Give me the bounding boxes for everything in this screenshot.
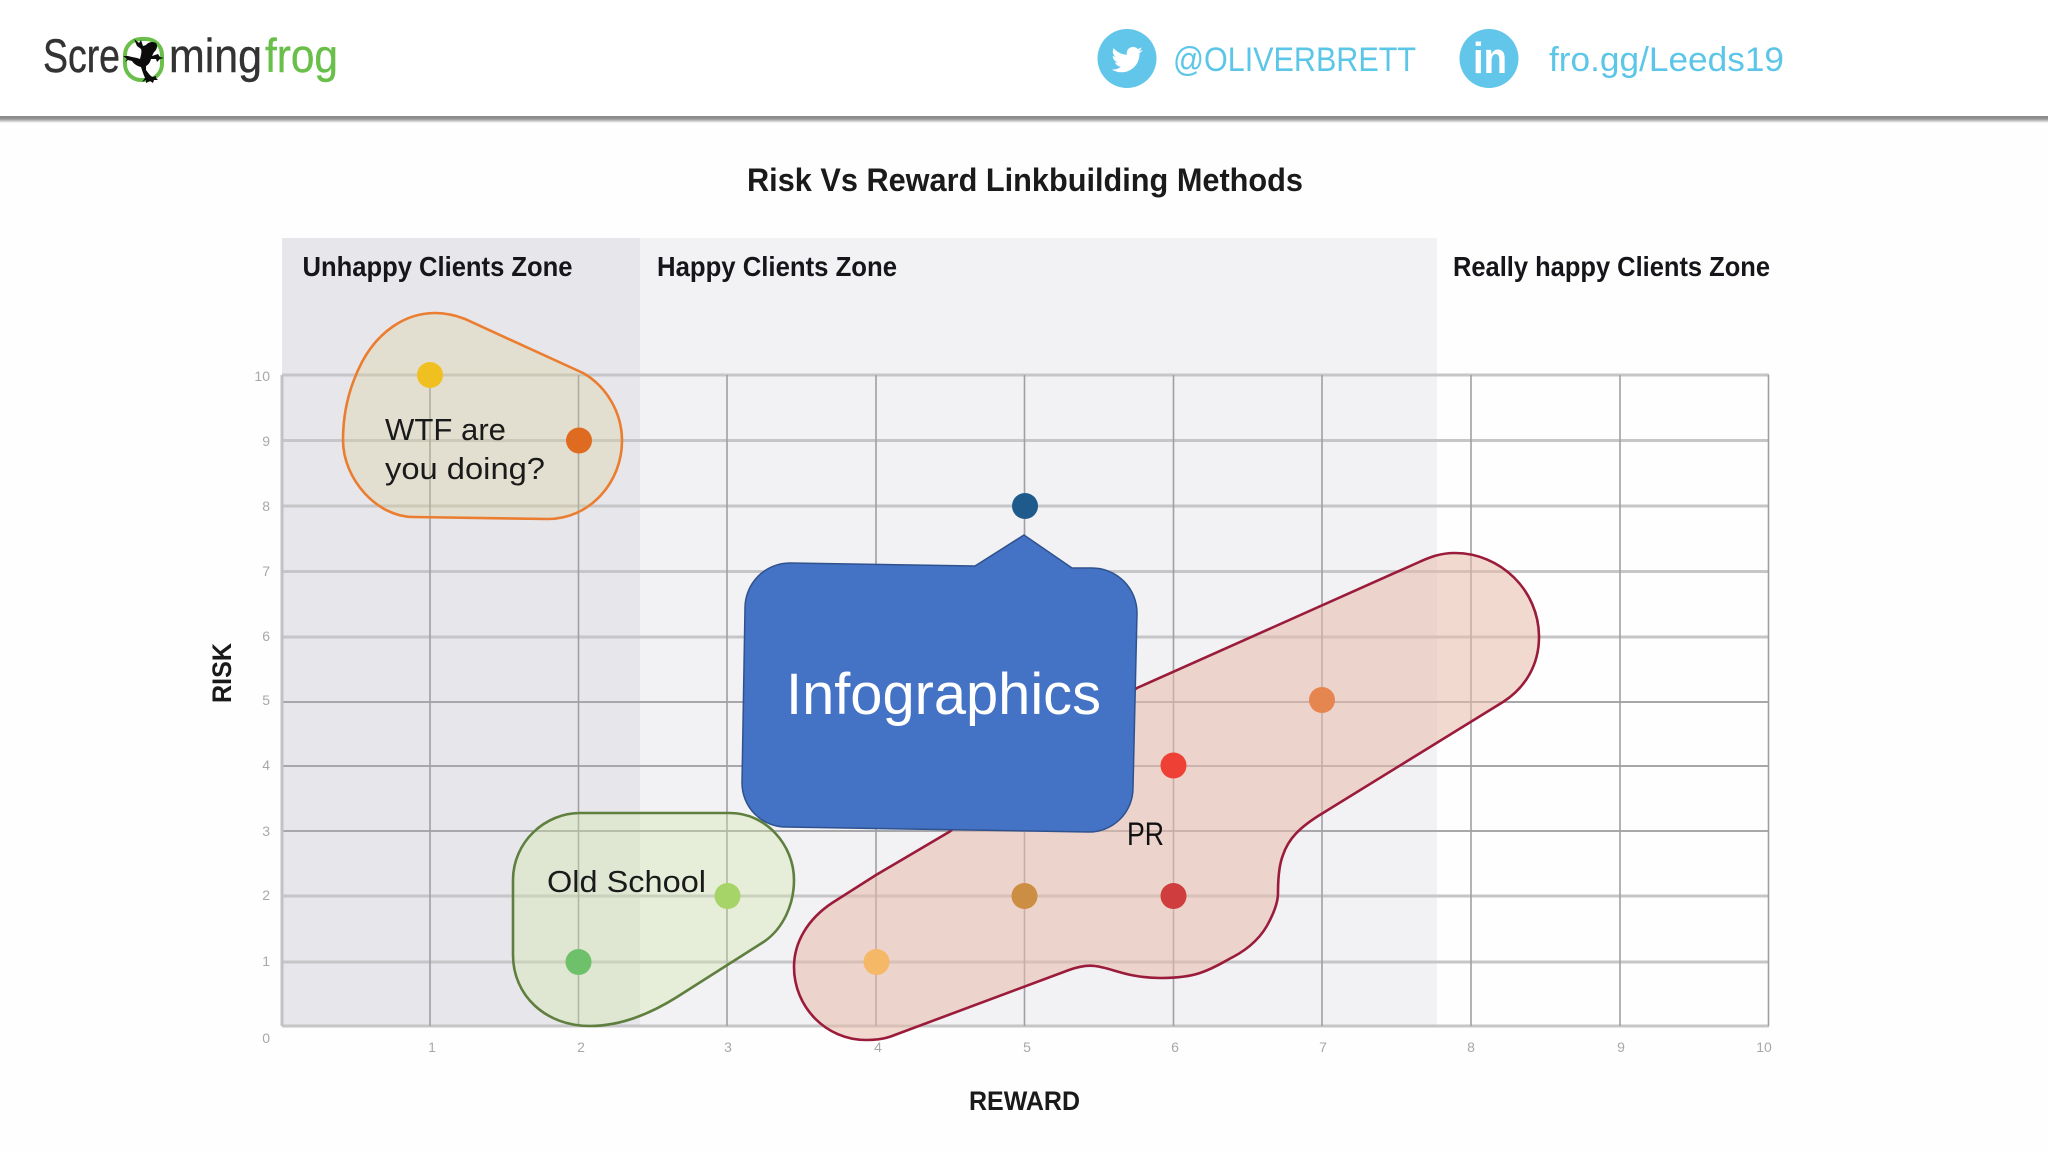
y axis tick labels: 4 (262, 757, 270, 773)
blob: old school (513, 813, 794, 1026)
panel: happy clients zone (640, 238, 1437, 1026)
x axis tick labels: 5 (1023, 1039, 1031, 1055)
y axis tick labels: 1 (262, 953, 270, 969)
icon: linkedin: in (1473, 34, 1507, 83)
chart: risk vs reward grid (282, 375, 1769, 1026)
x axis tick labels: 7 (1319, 1039, 1327, 1055)
point: orange (1309, 687, 1335, 713)
icon: twitter (1098, 29, 1156, 88)
x axis label: REWARD (969, 1086, 1080, 1116)
y axis tick labels: 7 (262, 563, 270, 579)
link text: fro.gg/Leeds19 (1549, 41, 1784, 79)
y axis tick labels: 9 (262, 433, 270, 449)
logo: Screaming Frog: frog (265, 29, 338, 82)
point: light green (714, 883, 740, 909)
x axis tick labels: 6 (1171, 1039, 1179, 1055)
x axis tick labels: 2 (577, 1039, 585, 1055)
point: green (566, 949, 592, 975)
point: dark orange (566, 428, 592, 454)
icon: linkedin (1460, 29, 1518, 88)
point: dark red (1160, 883, 1186, 909)
blob label: Old School (547, 864, 706, 899)
point: red (1160, 752, 1186, 778)
y axis tick labels: 6 (262, 628, 270, 644)
point: light orange (864, 949, 890, 975)
x axis tick labels: 10 (1756, 1039, 1772, 1055)
y axis tick labels: 10 (254, 368, 270, 384)
y axis tick labels: 3 (262, 823, 270, 839)
blob label (385, 412, 545, 486)
y axis tick labels: 5 (262, 692, 270, 708)
twitter handle: @OLIVERBRETT (1173, 41, 1416, 79)
y axis label: RISK (207, 643, 237, 703)
header bar (0, 0, 2048, 123)
point: brown (1012, 883, 1038, 909)
x axis tick labels: 1 (428, 1039, 436, 1055)
zone heading: really happy: Really happy Clients Zone (1453, 251, 1770, 282)
label: PR: PR (1127, 816, 1164, 852)
y axis tick labels: 0 (262, 1030, 270, 1046)
y axis tick labels (254, 368, 270, 1046)
blob: WTF are you doing (343, 313, 622, 519)
x axis tick labels: 4 (874, 1039, 882, 1055)
logo: Screaming Frog: ming (169, 29, 262, 82)
panel: unhappy clients zone (282, 238, 640, 1026)
zone heading: happy: Happy Clients Zone (657, 251, 897, 282)
y axis tick labels: 8 (262, 498, 270, 514)
x axis tick labels: 3 (724, 1039, 732, 1055)
logo: Screaming Frog: Scre (43, 29, 120, 82)
logo: Screaming Frog (43, 29, 338, 83)
callout: infographics: Infographics (786, 662, 1101, 727)
zone heading: unhappy: Unhappy Clients Zone (302, 251, 572, 282)
icon: frog on green at sign (123, 39, 164, 83)
x axis tick labels: 9 (1617, 1039, 1625, 1055)
title: Risk Vs Reward Linkbuilding Methods (747, 162, 1303, 198)
x axis tick labels (428, 1039, 1772, 1055)
blob label: WTF are (385, 412, 506, 447)
y axis tick labels: 2 (262, 887, 270, 903)
blob: PR (794, 553, 1539, 1040)
point: infographics blue (1012, 493, 1038, 519)
callout: infographics (742, 535, 1137, 832)
x axis tick labels: 8 (1467, 1039, 1475, 1055)
blob label: you doing? (385, 451, 545, 486)
point: yellow (417, 362, 443, 388)
